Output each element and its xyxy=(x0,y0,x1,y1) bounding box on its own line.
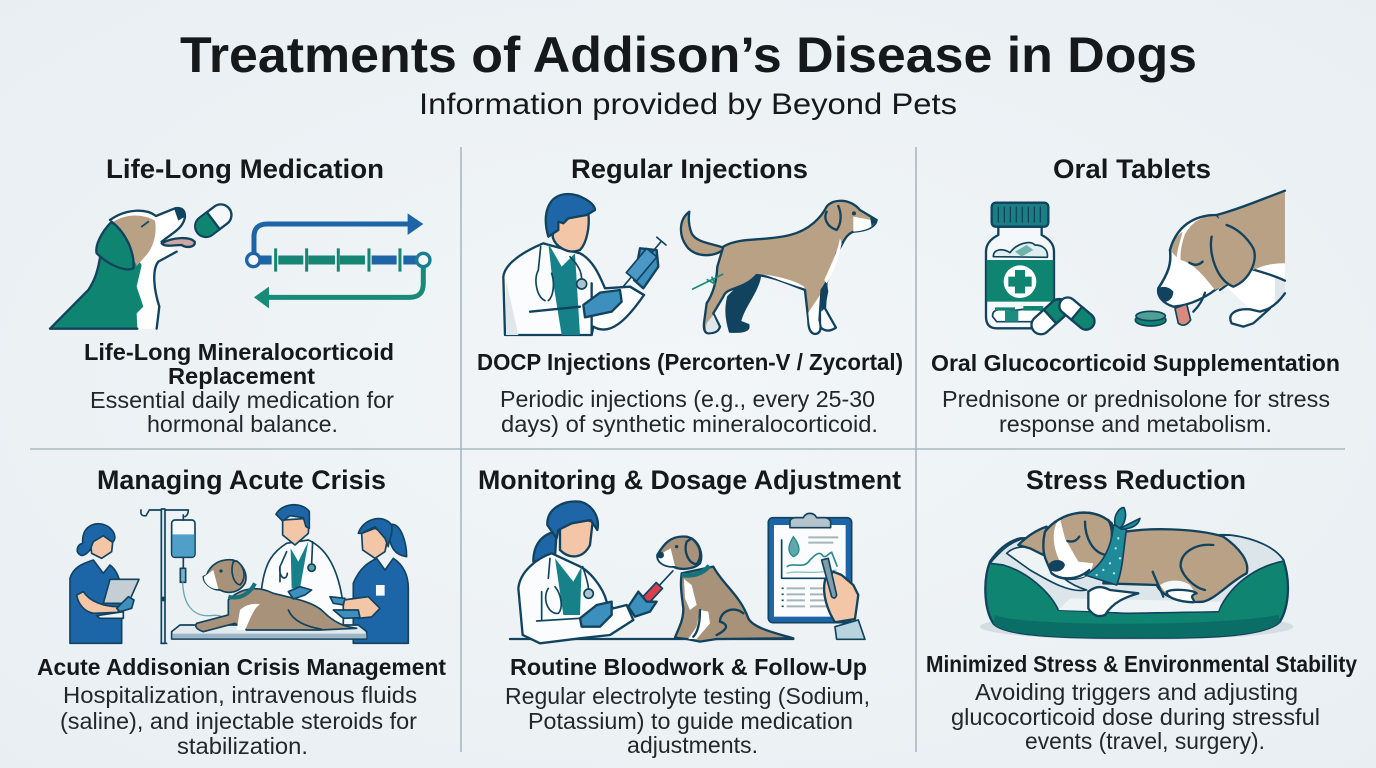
subheading: DOCP Injections (Percorten-V / Zycortal) xyxy=(477,349,903,375)
description: (saline), and injectable steroids for xyxy=(60,708,417,734)
gloves xyxy=(288,587,360,618)
pillow xyxy=(1007,547,1087,591)
description: glucocorticoid dose during stressful xyxy=(951,704,1320,730)
heading: Monitoring & Dosage Adjustment xyxy=(478,465,901,495)
icon: vet with syringe xyxy=(503,194,667,335)
arrow: return cycle xyxy=(267,266,423,297)
title: Treatments of Addison’s Disease in Dogs xyxy=(180,27,1197,83)
iv stand xyxy=(141,509,228,643)
description: Regular electrolyte testing (Sodium, xyxy=(505,683,870,709)
heading: Oral Tablets xyxy=(1053,154,1211,184)
heading: Regular Injections xyxy=(571,154,808,184)
icon: medicine bottle xyxy=(986,203,1098,338)
subheading: Oral Glucocorticoid Supplementation xyxy=(931,350,1340,376)
heading: Stress Reduction xyxy=(1026,465,1246,495)
icon: dog sleeping in bed xyxy=(980,508,1293,640)
description: hormonal balance. xyxy=(147,411,338,437)
subheading: Life-Long Mineralocorticoid xyxy=(84,339,394,365)
description xyxy=(942,386,1330,437)
subheading: Replacement xyxy=(168,363,315,389)
subheading xyxy=(84,339,394,389)
description: Avoiding triggers and adjusting xyxy=(975,679,1298,705)
description: Essential daily medication for xyxy=(90,387,394,413)
description xyxy=(90,387,394,437)
description: response and metabolism. xyxy=(999,411,1272,437)
arrow: injection site xyxy=(692,274,723,289)
dog on table xyxy=(196,560,357,632)
syringe hand xyxy=(634,248,658,288)
description xyxy=(505,683,870,758)
panel: managing acute crisis xyxy=(37,465,446,759)
panel: life-long medication xyxy=(50,154,430,437)
heading: Managing Acute Crisis xyxy=(97,465,386,495)
syringe xyxy=(618,237,667,291)
description xyxy=(951,679,1320,754)
sleeping dog xyxy=(1018,508,1247,616)
icon: capsule xyxy=(191,200,236,241)
subheading: Routine Bloodwork & Follow-Up xyxy=(510,654,867,680)
head and back xyxy=(1217,191,1285,270)
arrow: forward cycle xyxy=(254,224,410,255)
clipboard with chart xyxy=(768,513,852,623)
description: Prednisone or prednisolone for stress xyxy=(942,386,1330,412)
bandana xyxy=(1085,525,1127,585)
panel: regular injections xyxy=(477,154,903,437)
description: Periodic injections (e.g., every 25-30 xyxy=(500,386,875,412)
icon: capsules xyxy=(1028,294,1098,338)
timeline xyxy=(260,246,418,273)
panel: stress reduction xyxy=(926,465,1357,754)
subtitle: Information provided by Beyond Pets xyxy=(419,88,957,121)
veterinarian xyxy=(262,505,343,628)
nurse with tablet xyxy=(70,524,139,643)
heading: Life-Long Medication xyxy=(106,154,384,184)
description xyxy=(500,386,878,437)
icon: standing dog with injection site xyxy=(681,201,877,334)
icon: vet drawing blood from dog xyxy=(510,501,865,643)
icon: clinic team treating dog xyxy=(70,505,408,643)
exam table xyxy=(172,625,367,639)
description xyxy=(60,682,417,759)
nurse with ponytail xyxy=(343,519,408,643)
description: events (travel, surgery). xyxy=(1025,728,1265,754)
description: adjustments. xyxy=(627,732,758,758)
leg and chest xyxy=(1213,263,1285,312)
panel: oral tablets xyxy=(931,154,1340,437)
hand with pen xyxy=(822,558,865,639)
description: Potassium) to guide medication xyxy=(528,708,853,734)
panel: monitoring and dosage xyxy=(478,465,901,758)
subheading: Acute Addisonian Crisis Management xyxy=(37,654,446,680)
icon: tablet xyxy=(1135,314,1166,326)
description: Hospitalization, intravenous fluids xyxy=(63,682,417,708)
description: stabilization. xyxy=(177,733,308,759)
icon: dog taking capsule xyxy=(50,200,430,329)
description: days) of synthetic mineralocorticoid. xyxy=(501,411,878,437)
icon: dog licking tablet xyxy=(1135,191,1285,327)
sitting dog xyxy=(657,536,793,642)
